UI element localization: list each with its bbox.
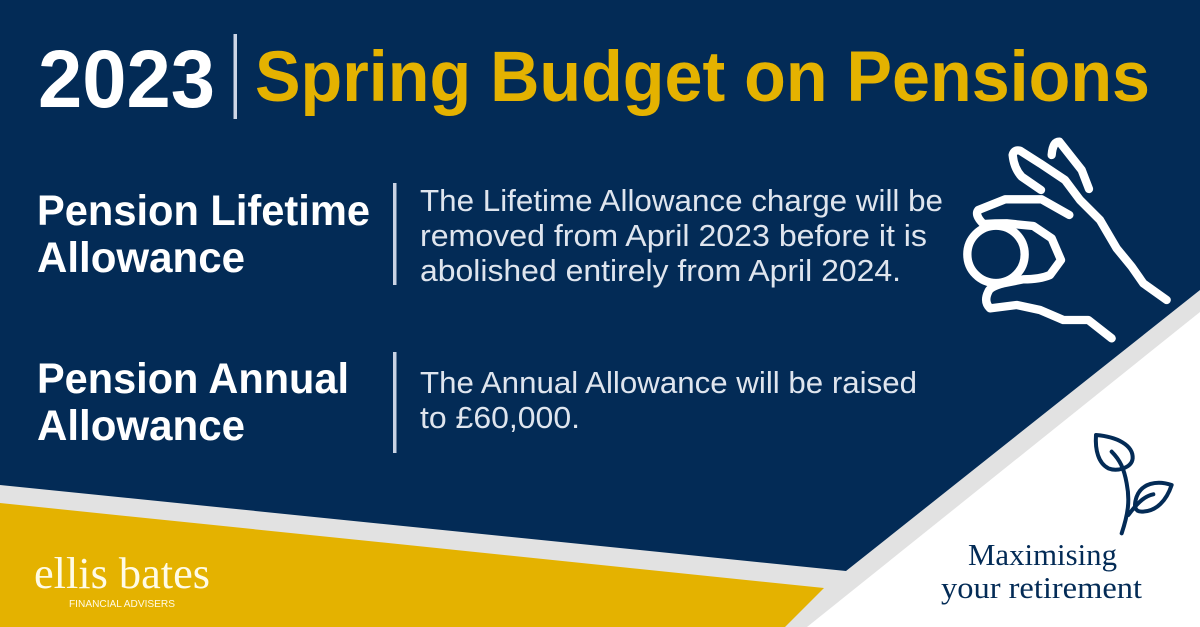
icon: hand holding coin bbox=[967, 142, 1167, 338]
text: lifetime allowance description: The Lifetime Allowance charge will be bbox=[420, 183, 943, 218]
heading: pension annual allowance: Pension Annual bbox=[37, 355, 349, 403]
text: lifetime allowance description bbox=[420, 183, 943, 288]
title: Spring Budget on Pensions bbox=[255, 38, 1150, 117]
yellow logo panel bbox=[0, 503, 824, 627]
logo: ellis bates: FINANCIAL ADVISERS bbox=[69, 598, 175, 610]
white corner panel bbox=[807, 312, 1200, 627]
heading: pension lifetime allowance: Allowance bbox=[37, 234, 245, 282]
heading: pension lifetime allowance: Pension Lifetime bbox=[37, 187, 370, 235]
panel: pension annual allowance bbox=[37, 352, 917, 453]
grey bottom band bbox=[0, 290, 1200, 627]
logo: ellis bates: ellis bates bbox=[34, 549, 210, 598]
heading: pension lifetime allowance bbox=[37, 187, 370, 282]
text: lifetime allowance description: removed from April 2023 before it is bbox=[420, 218, 927, 253]
icon: seedling bbox=[1096, 435, 1172, 533]
panel: pension lifetime allowance bbox=[37, 183, 943, 288]
text: lifetime allowance description: abolished entirely from April 2024. bbox=[420, 253, 901, 288]
heading: pension annual allowance bbox=[37, 355, 349, 450]
text: annual allowance description: to £60,000. bbox=[420, 400, 580, 435]
heading: pension annual allowance: Allowance bbox=[37, 402, 245, 450]
title: 2023 bbox=[38, 34, 215, 125]
text: annual allowance description bbox=[420, 365, 917, 435]
tagline: maximising your retirement bbox=[941, 537, 1142, 605]
title bbox=[38, 34, 1150, 125]
tagline: maximising your retirement: Maximising bbox=[968, 537, 1117, 572]
tagline: maximising your retirement: your retirement bbox=[941, 570, 1142, 605]
text: annual allowance description: The Annual Allowance will be raised bbox=[420, 365, 917, 400]
